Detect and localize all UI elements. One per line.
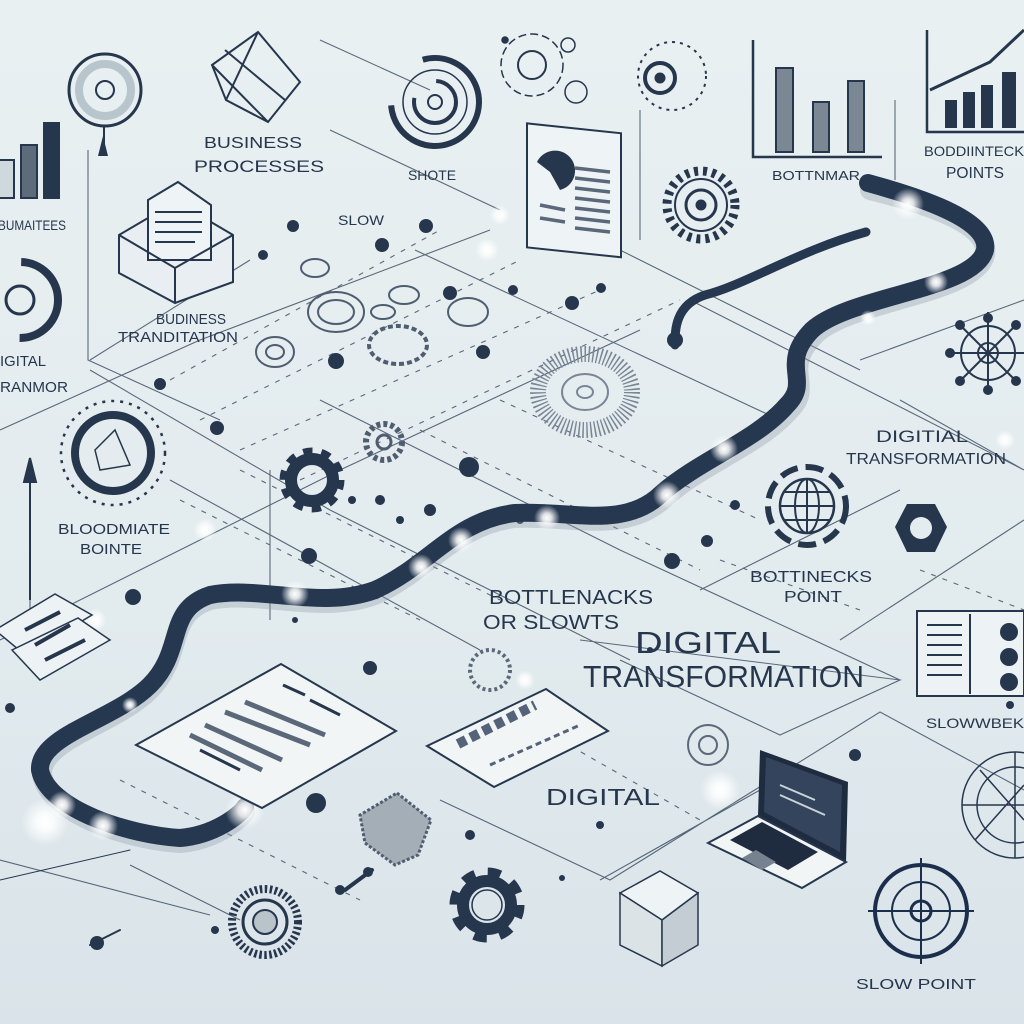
label: business transformation: BUDINESS <box>156 311 226 328</box>
label: digital transformation left: RANMOR <box>0 379 68 396</box>
label: business left: BUMAITEES <box>0 217 66 233</box>
label: digital transformation right <box>846 427 1006 468</box>
label: bottleneck points: POINTS <box>946 165 1004 182</box>
arrow: top-left upward <box>98 136 108 156</box>
icon: globe badge <box>768 467 846 545</box>
label: business transformation <box>118 311 238 346</box>
label: bottlenecks point: POINT <box>784 589 843 606</box>
label: slow: SLOW <box>338 212 385 228</box>
icon: hexagon nut <box>895 504 947 552</box>
title: digital transformation: DIGITAL <box>635 625 781 660</box>
label: bottlenecks or slowdowns: OR SLOWTS <box>483 612 619 634</box>
document: left isometric cards <box>0 594 110 680</box>
arrow: left upward <box>24 458 36 600</box>
label: bottleneck points <box>924 143 1024 182</box>
document: small isometric sheet <box>427 689 608 787</box>
label: digital transformation right: DIGITIAL <box>876 427 968 446</box>
icon: stippled disc <box>538 354 632 430</box>
label: digital transformation left: IGITAL <box>0 353 46 370</box>
label: business processes: PROCESSES <box>194 157 324 176</box>
label: bottlenecks or slowdowns <box>483 587 653 634</box>
icons: centre rings <box>256 259 488 367</box>
icon: spoked wheel <box>946 312 1024 394</box>
icon: report chart page <box>527 123 621 257</box>
icon: bottom gear <box>454 872 520 938</box>
icon: small swirl <box>470 650 728 765</box>
label: bottleneck points left: BOINTE <box>80 541 142 558</box>
label: bottlenecks point <box>750 569 872 606</box>
icon: dotted circle <box>638 42 706 110</box>
label: business processes <box>194 135 324 176</box>
icon: left ring <box>0 262 58 338</box>
label: bottleneck points left <box>58 521 170 558</box>
label: bottlenecks point: BOTTINECKS <box>750 569 872 586</box>
label: slow weeks: SLOWWBEK <box>926 715 1024 731</box>
label: bottleneck points: BODDIINTECK <box>924 143 1024 159</box>
icon: envelope box <box>119 182 233 303</box>
icon: 3d box <box>620 871 698 966</box>
bar chart: top centre <box>753 40 882 157</box>
title: digital transformation <box>583 625 864 694</box>
icon: concentric target <box>379 46 491 158</box>
bar chart: left edge <box>0 123 59 198</box>
label: bottlenecks or slowdowns: BOTTLENACKS <box>489 587 653 609</box>
icon: bottom-left ring <box>232 889 298 955</box>
connection nodes <box>5 219 1014 950</box>
label: business processes: BUSINESS <box>204 135 302 152</box>
title: digital transformation: TRANSFORMATION <box>583 659 864 694</box>
dashes: bottom-left links <box>0 850 372 945</box>
document: central isometric sheet <box>136 664 396 808</box>
label: digital transformation left <box>0 353 68 396</box>
icon: network orbit <box>501 34 587 103</box>
icon: small dial <box>366 424 402 460</box>
icon: black gear <box>284 452 340 508</box>
ribbon highlights <box>21 188 1015 846</box>
icon: textured hexagon <box>360 793 431 865</box>
label: bottleneck: BOTTNMAR <box>772 168 860 183</box>
bar chart: top right <box>927 30 1024 132</box>
icon: laptop <box>708 750 848 888</box>
icon: target bottom right <box>868 858 974 964</box>
icon: right wheel sketch <box>962 752 1024 858</box>
icon: gear dial <box>667 171 735 239</box>
icon: folded box <box>212 32 300 122</box>
label: slow point: SLOW POINT <box>856 976 976 993</box>
icon: top-left target <box>69 54 141 145</box>
document: slow panel icon <box>917 611 1024 696</box>
label: business transformation: TRANDITATION <box>118 329 238 346</box>
path ribbon <box>40 183 985 843</box>
label: digital: DIGITAL <box>546 784 660 810</box>
label: digital transformation right: TRANSFORMATION <box>846 451 1006 468</box>
icon: dashed ring <box>61 401 165 505</box>
label: bottleneck points left: BLOODMIATE <box>58 521 170 538</box>
label: shore: SHOTE <box>408 167 456 183</box>
